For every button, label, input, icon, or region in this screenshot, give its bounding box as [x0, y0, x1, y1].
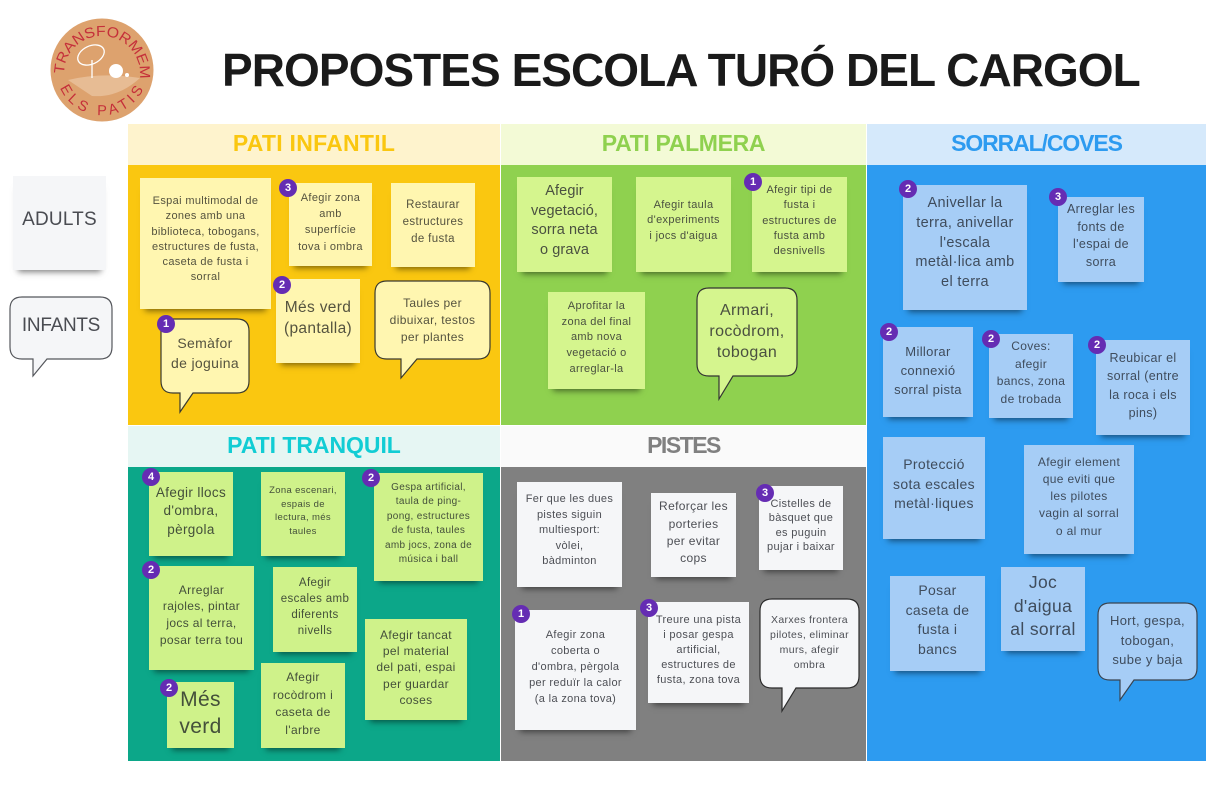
note: afegir tancat: pel material	[383, 644, 449, 658]
note: afegir llocs d'ombra: d'ombra,	[164, 503, 218, 518]
badge: 1 vote: 1	[163, 318, 169, 330]
note: afegir zona coberta	[515, 610, 636, 730]
note: més verd pantalla: (pantalla)	[284, 320, 352, 336]
logo: Transformem els patis: ELS PATIS	[60, 84, 142, 116]
badge: 1 vote: 1	[750, 176, 756, 188]
note: afegir tancat: coses	[399, 693, 433, 707]
note: afegir rocòdrom: Afegir	[286, 670, 320, 684]
note: afegir rocòdrom: caseta de	[275, 705, 331, 719]
note: arreglar les fonts: sorra	[1086, 255, 1116, 269]
note: afegir zona coberta: per reduïr la calor	[529, 677, 622, 689]
heading: Pati Tranquil: PATI TRANQUIL	[227, 432, 401, 458]
badge: 4 votes	[142, 468, 160, 486]
note: posar caseta: Posar	[918, 582, 957, 598]
note: espai multimodal: caseta de fusta i	[162, 256, 249, 268]
note: cistelles de bàsquet: bàsquet que	[769, 512, 833, 524]
note: afegir taula: Afegir taula	[654, 199, 713, 211]
badge: 1 vote	[157, 315, 175, 333]
badge: 1 vote	[512, 605, 530, 623]
note: afegir llocs d'ombra: pèrgola	[167, 522, 215, 537]
note: millorar connexió: Millorar	[905, 344, 951, 358]
note: afegir vegetació: vegetació,	[531, 203, 598, 219]
badge: 2 votes	[982, 330, 1000, 348]
legend: infants speech bubble	[9, 296, 113, 378]
note: restaurar: Restaurar	[406, 199, 460, 211]
note: coves: afegir	[1015, 357, 1047, 371]
note: joc d'aigua: Joc	[1029, 572, 1057, 592]
panel: Pati Infantil	[128, 124, 500, 425]
note: afegir tipi: fusta i	[784, 199, 815, 211]
note: reubicar el sorral	[1096, 340, 1190, 435]
note: més verd: Més	[180, 688, 221, 710]
note: treure una pista: Treure una pista	[656, 614, 741, 626]
note: afegir escales: escales amb	[281, 593, 349, 605]
note: arreglar rajoles: jocs al terra,	[166, 616, 237, 630]
logo: Transformem els patis: TRANSFORMEM	[54, 26, 150, 78]
bubble: taules per dibuixar: dibuixar, testos	[390, 312, 475, 326]
badge: 2 votes: 2	[279, 279, 285, 291]
note: afegir vegetació	[517, 177, 612, 272]
note: afegir vegetació: o grava	[540, 242, 589, 258]
note: anivellar la terra: Anivellar la	[927, 195, 1003, 211]
note: zona escenari: taules	[289, 526, 317, 536]
note: afegir vegetació: Afegir	[545, 183, 584, 199]
badge: 2 votes: 2	[368, 472, 374, 484]
heading: Sorral/Coves: SORRAL/COVES	[951, 130, 1122, 156]
heading: Sorral/Coves	[867, 124, 1206, 165]
heading: Pati Tranquil	[128, 426, 500, 467]
bubble: hort, gespa, tobogan: Hort, gespa,	[1110, 613, 1185, 628]
note: afegir rocòdrom: l'arbre	[285, 722, 321, 736]
note: arreglar les fonts	[1058, 197, 1144, 282]
note: afegir element pilotes: que eviti que	[1043, 472, 1115, 486]
note: afegir tancat: Afegir tancat	[380, 628, 452, 642]
note: coves: de trobada	[1001, 392, 1061, 406]
panel: Sorral/Coves	[867, 124, 1206, 761]
note: arreglar rajoles: posar terra tou	[160, 633, 243, 647]
note: cistelles de bàsquet: es puguin	[776, 527, 826, 539]
panel: Pistes	[501, 432, 866, 761]
badge: 2 votes: 2	[148, 564, 154, 576]
note: joc d'aigua	[1001, 567, 1085, 651]
note: afegir zona coberta: d'ombra, pèrgola	[532, 661, 619, 673]
note: afegir escales: Afegir	[299, 577, 331, 589]
note: fer multiesport: vòlei,	[556, 540, 583, 552]
note: afegir zona: amb	[319, 208, 342, 220]
note: restaurar: de fusta	[411, 233, 455, 245]
note: afegir tipi: desnivells	[774, 245, 825, 257]
note: arreglar rajoles: rajoles, pintar	[163, 599, 240, 613]
note: reforçar porteries: per evitar	[667, 534, 720, 548]
note: arreglar rajoles	[149, 566, 254, 670]
badge: 2 votes	[880, 323, 898, 341]
note: posar caseta	[890, 576, 985, 671]
note: afegir tipi: fusta amb	[774, 230, 825, 242]
badge: 3 votes	[640, 599, 658, 617]
note: aprofitar la zona: zona del final	[562, 316, 631, 328]
badge: 2 votes: 2	[166, 682, 172, 694]
note: afegir zona: Afegir zona	[301, 192, 360, 204]
note: joc d'aigua: al sorral	[1010, 619, 1076, 639]
badge: 2 votes	[1088, 336, 1106, 354]
title: PROPOSTES ESCOLA TURÓ DEL CARGOL	[222, 44, 1140, 96]
note: arreglar rajoles: Arreglar	[179, 583, 224, 597]
note: millorar connexió: connexió	[901, 362, 955, 378]
note: afegir tipi	[752, 177, 847, 272]
note: afegir tipi: Afegir tipi de	[766, 184, 833, 196]
note: més verd pantalla: Més verd	[285, 299, 351, 316]
note: gespa artificial: pong, estructures	[387, 511, 470, 522]
note: afegir rocòdrom: rocòdrom i	[273, 688, 333, 702]
note: afegir tancat	[365, 619, 467, 720]
note: millorar connexió	[883, 327, 973, 417]
bubble: xarxes frontera: Xarxes frontera	[771, 614, 848, 626]
note: gespa artificial: de fusta, taules	[392, 525, 465, 536]
note: coves: Coves:	[1011, 339, 1051, 353]
note: protecció sota escales: Protecció	[903, 456, 965, 472]
note: afegir escales: diferents	[291, 609, 339, 621]
panel: Pati Tranquil	[128, 426, 500, 761]
note: aprofitar la zona	[548, 292, 645, 389]
note: protecció sota escales: metàl·liques	[894, 495, 974, 511]
note: millorar connexió: sorral pista	[894, 382, 962, 396]
note: gespa artificial: Gespa artificial,	[391, 482, 466, 493]
note: fer multiesport: multiesport:	[539, 524, 600, 536]
note: reubicar el sorral: la roca i els	[1109, 388, 1177, 402]
badge: 2 votes: 2	[905, 183, 911, 195]
note: més verd: verd	[179, 714, 222, 738]
heading: Pistes: PISTES	[647, 432, 720, 458]
bubble: xarxes frontera: murs, afegir	[780, 644, 839, 656]
badge: 3 votes	[1049, 188, 1067, 206]
note: gespa artificial: taula de ping-	[396, 496, 461, 507]
note: posar caseta: fusta i	[918, 621, 957, 637]
note: afegir llocs d'ombra	[149, 472, 233, 556]
note: restaurar: estructures	[403, 216, 463, 228]
bubble: armari, rocòdrom, tobogan	[696, 287, 798, 401]
note: espai multimodal: zones amb una	[166, 210, 245, 222]
note: treure una pista: artificial,	[676, 644, 721, 656]
bubble: hort, gespa, tobogan: sube y baja	[1112, 652, 1183, 667]
badge: 3 votes: 3	[762, 487, 768, 499]
note: afegir taula: i jocs d'aigua	[649, 230, 718, 242]
note: afegir element pilotes: o al mur	[1056, 524, 1102, 538]
bubble: semàfor de joguina: de joguina	[171, 354, 239, 370]
note: afegir zona: tova i ombra	[298, 241, 363, 253]
note: afegir taula: d'experiments	[647, 214, 720, 226]
note: arreglar les fonts: Arreglar les	[1067, 202, 1135, 216]
note: espai multimodal: biblioteca, tobogans,	[151, 226, 260, 238]
note: zona escenari: espais de	[281, 498, 325, 510]
legend: adults note	[13, 176, 106, 270]
heading: Pati Palmera	[501, 124, 866, 165]
note: aprofitar la zona: amb nova	[571, 331, 622, 343]
note: anivellar la terra: metàl·lica amb	[915, 254, 1015, 270]
note: treure una pista: estructures de	[661, 658, 736, 670]
note: treure una pista	[648, 602, 749, 703]
note: afegir element pilotes: vagin al sorral	[1039, 506, 1119, 520]
bubble: armari, rocòdrom, tobogan: tobogan	[717, 344, 777, 360]
bubble: hort, gespa, tobogan	[1097, 602, 1198, 702]
note: afegir element pilotes: les pilotes	[1050, 489, 1108, 503]
note: gespa artificial: música i ball	[399, 554, 458, 565]
note: treure una pista: fusta, zona tova	[657, 674, 740, 686]
bubble: xarxes frontera	[759, 598, 860, 713]
note: aprofitar la zona: Aprofitar la	[568, 300, 625, 312]
note: afegir zona coberta: coberta o	[551, 645, 600, 657]
note: fer multiesport: Fer que les dues	[526, 493, 613, 505]
heading: Pistes	[501, 426, 866, 467]
note: joc d'aigua: d'aigua	[1014, 596, 1072, 616]
heading: Pati Infantil: PATI INFANTIL	[233, 130, 395, 156]
badge: 2 votes: 2	[886, 326, 892, 338]
note: afegir tancat: del pati, espai	[376, 660, 456, 674]
bubble: taules per dibuixar	[374, 280, 491, 380]
note: arreglar les fonts: fonts de	[1077, 220, 1125, 234]
note: reforçar porteries: porteries	[669, 517, 718, 531]
bubble: semàfor de joguina: Semàfor	[177, 335, 233, 351]
note: afegir zona: superfície	[305, 224, 356, 236]
note: afegir escales	[273, 567, 357, 652]
badge: 2 votes: 2	[1094, 339, 1100, 351]
bubble: xarxes frontera: ombra	[794, 658, 825, 670]
note: afegir element pilotes: Afegir element	[1038, 454, 1120, 468]
note: espai multimodal: estructures de fusta,	[152, 241, 259, 253]
note: reubicar el sorral: pins)	[1129, 406, 1157, 420]
badge: 2 votes	[899, 180, 917, 198]
logo: Transformem els patis	[50, 18, 154, 122]
panel: Pati Palmera	[501, 124, 866, 425]
note: afegir taula	[636, 177, 731, 272]
badge: 2 votes	[142, 561, 160, 579]
badge: 2 votes	[160, 679, 178, 697]
note: afegir vegetació: sorra neta	[531, 222, 598, 238]
bubble: hort, gespa, tobogan: tobogan,	[1121, 633, 1174, 648]
note: zona escenari: Zona escenari,	[269, 485, 337, 496]
note: més verd	[167, 682, 234, 748]
badge: 1 vote	[744, 173, 762, 191]
note: treure una pista: i posar gespa	[663, 628, 734, 640]
note: gespa artificial	[374, 473, 483, 581]
note: fer multiesport: bàdminton	[542, 555, 597, 567]
note: protecció sota escales	[883, 437, 985, 539]
note: reubicar el sorral: sorral (entre	[1107, 369, 1179, 383]
note: protecció sota escales: sota escales	[893, 476, 975, 492]
note: anivellar la terra: terra, anivellar	[916, 215, 1014, 231]
note: posar caseta: caseta de	[906, 602, 969, 618]
note: cistelles de bàsquet: pujar i baixar	[767, 541, 835, 553]
note: espai multimodal: Espai multimodal de	[153, 195, 258, 207]
note: reforçar porteries: cops	[680, 551, 707, 565]
legend: infants speech bubble: INFANTS	[22, 315, 100, 336]
note: anivellar la terra	[903, 185, 1027, 310]
note: posar caseta: bancs	[918, 641, 957, 657]
note: arreglar les fonts: l'espai de	[1073, 237, 1129, 251]
note: coves: bancs, zona	[997, 374, 1065, 388]
badge: 3 votes: 3	[646, 602, 652, 614]
badge: 4 votes: 4	[148, 471, 154, 483]
badge: 2 votes: 2	[988, 333, 994, 345]
note: més verd pantalla	[276, 279, 360, 363]
bubble: xarxes frontera: pilotes, eliminar	[770, 628, 849, 640]
note: zona escenari	[261, 472, 345, 556]
note: espai multimodal	[140, 178, 271, 309]
badge: 3 votes	[756, 484, 774, 502]
note: afegir zona	[289, 183, 372, 266]
note: afegir llocs d'ombra: Afegir llocs	[156, 485, 226, 500]
note: afegir element pilotes	[1024, 445, 1134, 554]
note: coves	[989, 334, 1073, 418]
badge: 3 votes: 3	[285, 182, 291, 194]
note: afegir tipi: estructures de	[762, 215, 837, 227]
note: anivellar la terra: el terra	[941, 274, 989, 290]
note: cistelles de bàsquet	[759, 486, 843, 570]
note: anivellar la terra: l'escala	[940, 235, 990, 251]
note: afegir tancat: per guardar	[383, 677, 449, 691]
note: afegir escales: nivells	[298, 625, 332, 637]
note: aprofitar la zona: vegetació o	[566, 347, 627, 359]
note: reubicar el sorral: Reubicar el	[1109, 351, 1177, 365]
badge: 2 votes	[362, 469, 380, 487]
bubble: armari, rocòdrom, tobogan: Armari,	[720, 302, 774, 318]
note: gespa artificial: amb jocs, zona de	[385, 540, 472, 551]
badge: 3 votes	[279, 179, 297, 197]
bubble: semàfor de joguina	[160, 318, 250, 414]
note: fer multiesport: pistes siguin	[537, 509, 602, 521]
badge: 1 vote: 1	[518, 608, 524, 620]
note: afegir rocòdrom	[261, 663, 345, 748]
legend: adults note: ADULTS	[22, 209, 97, 230]
note: restaurar	[391, 183, 475, 267]
note: zona escenari: lectura, més	[275, 512, 331, 523]
badge: 2 votes	[273, 276, 291, 294]
note: fer multiesport	[517, 482, 622, 587]
note: afegir zona coberta: (a la zona tova)	[535, 693, 616, 705]
note: reforçar porteries: Reforçar les	[659, 499, 728, 513]
note: aprofitar la zona: arreglar-la	[570, 363, 623, 375]
heading: Pati Infantil	[128, 124, 500, 165]
heading: Pati Palmera: PATI PALMERA	[602, 130, 765, 156]
note: espai multimodal: sorral	[191, 271, 220, 283]
bubble: taules per dibuixar: Taules per	[403, 296, 462, 310]
badge: 3 votes: 3	[1055, 191, 1061, 203]
bubble: taules per dibuixar: per plantes	[401, 330, 464, 344]
note: cistelles de bàsquet: Cistelles de	[770, 498, 832, 510]
bubble: armari, rocòdrom, tobogan: rocòdrom,	[709, 322, 785, 340]
note: afegir zona coberta: Afegir zona	[546, 629, 605, 641]
note: reforçar porteries	[651, 493, 736, 577]
